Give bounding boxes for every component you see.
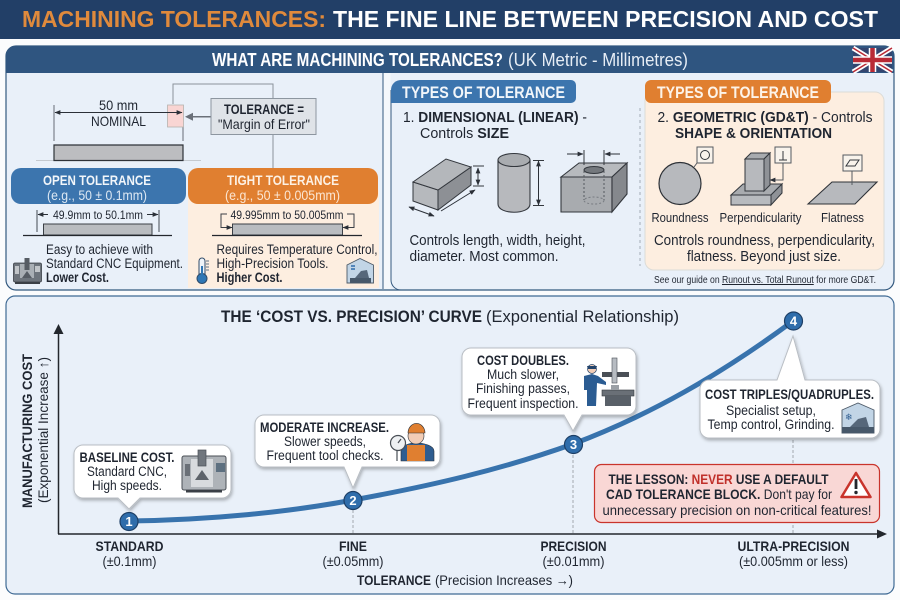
callout: moderate increase — [255, 415, 440, 488]
icon: rectangular block with dimensions — [409, 159, 484, 216]
label: fine: (±0.05mm) — [322, 553, 384, 569]
title banner — [0, 0, 900, 39]
icon: flatness — [808, 155, 877, 225]
marker 3: 3 — [570, 437, 577, 452]
text: tight tolerance description — [216, 242, 378, 285]
chart: point markers — [120, 312, 802, 530]
marker 4: 4 — [790, 314, 798, 328]
title banner: MACHINING TOLERANCES: — [22, 6, 326, 32]
divider — [639, 108, 641, 266]
diagram: open tolerance part: 49.9mm to 50.1mm — [53, 208, 143, 222]
callout: cost doubles — [462, 348, 636, 431]
x axis category labels — [96, 538, 850, 569]
diagram: nominal dimension and tolerance: NOMINAL — [91, 113, 146, 129]
callout: baseline cost: Standard CNC, — [87, 464, 167, 479]
text: dimensional heading — [403, 109, 587, 142]
icon: clean room machine: ❄ — [845, 412, 853, 422]
panel: geometric tolerance — [645, 80, 884, 270]
callout: baseline cost — [74, 445, 231, 509]
icon: roundness — [652, 147, 713, 225]
icon: perpendicularity: Perpendicularity — [720, 210, 802, 225]
heading: tight tolerance: TIGHT TOLERANCE — [227, 172, 339, 188]
callout: cost doubles: COST DOUBLES. — [477, 353, 569, 368]
text: dimensional description: diameter. Most common. — [410, 249, 558, 265]
icon: inspector with CMM — [584, 358, 634, 406]
callout: moderate increase: Slower speeds, — [284, 434, 366, 449]
diagram: tight tolerance part: 49.995mm to 50.005mm — [230, 208, 344, 222]
title banner: THE FINE LINE BETWEEN PRECISION AND COST — [333, 6, 878, 32]
callout: tolerance margin of error — [211, 98, 316, 134]
icon: warning triangle — [842, 473, 870, 497]
heading: cost curve — [221, 307, 679, 326]
panel: cost vs precision curve — [6, 296, 894, 594]
callout: cost triples or quadruples: COST TRIPLES/QUADRUPLES. — [705, 387, 874, 402]
text: dimensional heading: 1. DIMENSIONAL (LINEAR) - — [403, 109, 587, 126]
icon: perpendicularity — [720, 147, 802, 225]
callout: cost triples or quadruples — [700, 336, 880, 438]
label: precision — [540, 538, 606, 569]
diagram: open tolerance part — [23, 208, 172, 236]
chart: cost curve — [129, 321, 793, 521]
heading: tight tolerance — [188, 168, 378, 204]
text: geometric heading — [658, 109, 872, 142]
panel: what are machining tolerances — [6, 46, 894, 290]
heading: open tolerance: OPEN TOLERANCE — [43, 172, 151, 188]
y axis label: MANUFACTURING COST — [20, 353, 35, 508]
icon: CNC machine small — [14, 258, 42, 284]
icon: flatness: Flatness — [821, 210, 864, 225]
chart: axes — [54, 324, 887, 538]
heading: cost curve: THE ‘COST VS. PRECISION’ CURVE — [221, 307, 482, 326]
text: guide note: See our guide on Runout vs. Total Runout for more GD&T. — [654, 275, 876, 286]
icon: cylinder with height — [498, 154, 544, 212]
text: tight tolerance description: Higher Cost. — [216, 270, 282, 285]
callout: baseline cost: BASELINE COST. — [80, 450, 174, 465]
label: fine — [322, 538, 384, 569]
text: dimensional heading: Controls SIZE — [420, 125, 509, 142]
text: tight tolerance description: High-Precision Tools. — [216, 256, 328, 271]
heading: tight tolerance: (e.g., 50 ± 0.005mm) — [225, 187, 340, 203]
x axis title: TOLERANCE — [357, 572, 431, 588]
label: fine: FINE — [339, 538, 367, 554]
icon: UK flag — [853, 48, 892, 72]
x axis title — [357, 572, 573, 588]
marker 3 — [564, 436, 582, 454]
text: open tolerance description: Easy to achieve with — [46, 242, 153, 257]
callout: the lesson — [594, 464, 880, 522]
icon: thermometer — [197, 258, 209, 284]
heading: cost curve: (Exponential Relationship) — [486, 307, 679, 326]
panel: tight tolerance background — [188, 190, 379, 288]
panel heading: WHAT ARE MACHINING TOLERANCES? — [212, 50, 503, 70]
text: open tolerance description: Lower Cost. — [46, 270, 109, 285]
marker 2: 2 — [349, 493, 357, 508]
icon: clean room machine — [842, 403, 874, 433]
marker 4 — [784, 312, 802, 330]
label: ultra-precision: (±0.005mm or less) — [739, 553, 848, 569]
text: open tolerance description: Standard CNC Equipment. — [46, 256, 183, 271]
text: dimensional description — [410, 233, 586, 265]
marker 1: 1 — [125, 514, 133, 529]
y axis label — [20, 353, 51, 508]
callout: tolerance margin of error: TOLERANCE = — [224, 101, 304, 117]
diagram: nominal dimension and tolerance: 50 mm — [99, 97, 138, 113]
icon: clean room machine small — [347, 258, 374, 283]
callout: moderate increase: Frequent tool checks. — [266, 448, 384, 463]
marker 2 — [344, 492, 362, 510]
icon: worker with gauge — [390, 423, 434, 461]
label: precision: (±0.01mm) — [542, 553, 604, 569]
panel heading: (UK Metric - Millimetres) — [508, 50, 688, 70]
callout: the lesson: THE LESSON: NEVER USE A DEFAULT — [608, 471, 829, 487]
label: standard: (±0.1mm) — [102, 553, 156, 569]
icon: roundness: Roundness — [652, 210, 709, 225]
heading: types of tolerance dimensional: TYPES OF TOLERANCE — [402, 83, 565, 102]
label: precision: PRECISION — [540, 538, 606, 554]
callout: tolerance margin of error: "Margin of Error" — [218, 116, 310, 132]
icon: CNC machine — [182, 450, 226, 492]
text: geometric description: flatness. Beyond just size. — [687, 249, 841, 265]
callout: the lesson: unnecessary precision on non-critical features! — [602, 502, 872, 518]
heading: types of tolerance geometric: TYPES OF TOLERANCE — [657, 83, 819, 102]
text: geometric heading: 2. GEOMETRIC (GD&T) - Controls — [658, 109, 872, 126]
label: ultra-precision — [738, 538, 850, 569]
callout: cost triples or quadruples: Specialist setup, — [726, 403, 816, 418]
callout: cost doubles: Frequent inspection. — [468, 396, 578, 411]
text: geometric description — [654, 233, 875, 265]
label: standard — [96, 538, 164, 569]
callout: moderate increase: MODERATE INCREASE. — [260, 420, 389, 435]
x axis title: (Precision Increases →) — [435, 572, 573, 588]
heading: open tolerance — [11, 168, 186, 204]
callout: cost doubles: Much slower, — [487, 367, 559, 382]
y axis label: (Exponential Increase ↑) — [36, 357, 51, 503]
callout: baseline cost: High speeds. — [92, 478, 162, 493]
callout: the lesson: CAD TOLERANCE BLOCK. Don't pay for — [606, 486, 832, 502]
diagram: tight tolerance part — [212, 208, 362, 236]
text: tight tolerance description: Requires Temperature Control, — [216, 242, 378, 257]
marker 1 — [120, 512, 138, 530]
text: dimensional description: Controls length, width, height, — [410, 233, 586, 249]
heading: open tolerance: (e.g., 50 ± 0.1mm) — [47, 187, 147, 203]
label: ultra-precision: ULTRA-PRECISION — [738, 538, 850, 554]
callout: cost triples or quadruples: Temp control, Grinding. — [708, 417, 834, 432]
text: geometric description: Controls roundness, perpendicularity, — [654, 233, 875, 249]
icon: block with hole — [561, 150, 627, 212]
label: standard: STANDARD — [96, 538, 164, 554]
callout: cost doubles: Finishing passes, — [476, 381, 570, 396]
text: open tolerance description — [46, 242, 183, 285]
text: geometric heading: SHAPE & ORIENTATION — [675, 125, 832, 142]
diagram: nominal dimension and tolerance — [36, 84, 273, 168]
